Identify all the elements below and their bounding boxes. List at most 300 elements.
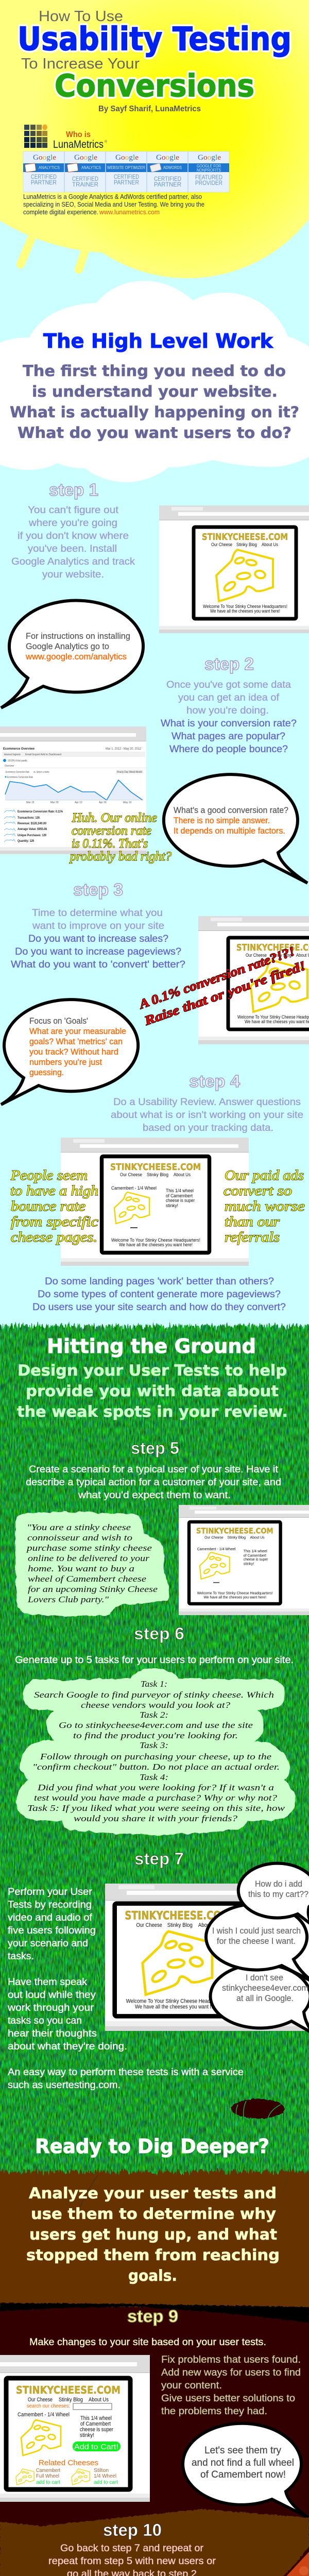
browser: analytics ecommerce overview: 100.00% of total quantity xyxy=(8,759,27,762)
browser: analytics ecommerce overview: Ecommerce Conversion Rate xyxy=(6,771,29,774)
site frame: Our Cheese xyxy=(211,542,232,547)
speech bubble: focus on goals: guessing. xyxy=(29,1067,64,1077)
sun glow xyxy=(33,0,309,278)
step 7 text: Perform your User xyxy=(8,1887,93,1897)
step 7 text: work through your xyxy=(7,2003,94,2013)
site frame: Related Cheeses xyxy=(39,2459,98,2467)
speech bubble: add to cart question: How do i add xyxy=(255,1879,302,1889)
badge 2: CERTIFIED xyxy=(72,175,98,182)
badge 1 xyxy=(25,154,60,186)
speech bubble: wish for search xyxy=(206,1904,309,1982)
scenario note: Lovers Club party." xyxy=(27,1595,109,1604)
title: Conversions xyxy=(55,68,254,104)
step 1 text: where you're going xyxy=(28,518,117,529)
site frame: cheese is super xyxy=(244,1557,268,1562)
title: By Sayf Sharif, LunaMetrics xyxy=(98,105,201,113)
who is lunametrics logo: Who is xyxy=(66,130,91,139)
step 7 text: Tests by recording xyxy=(8,1900,92,1910)
analyze text: goals. xyxy=(128,2267,177,2284)
badge 1: Google xyxy=(33,154,56,162)
soil roots xyxy=(21,2172,288,2226)
browser: analytics ecommerce overview: vs. Select a metric xyxy=(33,771,49,774)
site frame: We have all the cheeses you want here! xyxy=(135,2004,221,2010)
step 4 text: about what is or isn't working on your site xyxy=(111,1110,303,1121)
fixes list: Fix problems that users found. xyxy=(161,2354,301,2365)
step 2 text xyxy=(161,680,297,755)
step 5 text: describe a typical action for a customer of your site, and xyxy=(26,1477,281,1488)
site frame: Our Cheese xyxy=(246,953,267,958)
speech bubble: add to cart question xyxy=(238,1863,309,1926)
site frame: Camembert xyxy=(36,2468,60,2473)
badge 4: PARTNER xyxy=(154,181,181,188)
dark stratum xyxy=(0,2303,309,2323)
badge 1: CERTIFIED xyxy=(31,173,57,180)
site frame: Our Cheese xyxy=(28,2397,53,2403)
step 7 text xyxy=(7,1887,244,2091)
site frame: Camembert - 1/4 Wheel xyxy=(111,1185,157,1191)
site frame xyxy=(115,1904,241,2016)
step 3 label: step 3 xyxy=(73,880,123,899)
site frame: of Camembert xyxy=(244,1553,267,1558)
browser: analytics ecommerce overview: Hourly Day Week Month xyxy=(117,771,142,774)
step 7 text: out loud while they xyxy=(8,1990,96,2001)
who is lunametrics logo: LunaMetrics xyxy=(53,139,104,150)
speech bubble: analytics instructions: www.google.com/analytics xyxy=(25,652,127,662)
badge 4: Google xyxy=(156,154,179,162)
badge 1: PARTNER xyxy=(31,179,57,186)
speech bubble: focus on goals: numbers you're just xyxy=(29,1057,102,1067)
step 4 questions: Do some landing pages 'work' better than others? xyxy=(45,1276,274,1287)
task list note: Did you find what you were looking for? If it wasn't a xyxy=(37,1783,274,1792)
speech bubble: full wheel of camembert: Let's see them try xyxy=(204,2445,281,2456)
scenario note xyxy=(15,1512,169,1616)
handwritten note: bounce rate: cheese pages. xyxy=(11,1229,97,1245)
site frame: of Camembert xyxy=(80,2421,111,2427)
speech bubble: full wheel of camembert: of Camembert now! xyxy=(200,2469,286,2480)
intro text: is understand your website. xyxy=(32,383,278,400)
speech bubble: good conversion rate xyxy=(164,774,307,883)
task list note: Go to stinkycheese4ever.com and use the site xyxy=(59,1720,253,1730)
scenario note: for an upcoming Stinky Cheese xyxy=(28,1584,158,1594)
site frame: About Us xyxy=(89,2397,109,2403)
badge 4 xyxy=(150,154,182,188)
step 7 text: hear their thoughts xyxy=(8,2028,97,2039)
line chart: Apr 12 xyxy=(75,801,82,804)
step 9 text: Make changes to your site based on your user tests. xyxy=(29,2337,266,2348)
speech bubble: not in google: at all in Google. xyxy=(236,1993,294,2003)
section heading: the high level work xyxy=(10,330,299,442)
handwritten note: bounce rate: People seem xyxy=(10,1167,88,1183)
browser: analytics ecommerce overview: Email Export Add to Dashboard xyxy=(25,753,61,756)
badge 3: CERTIFIED xyxy=(114,173,139,180)
site frame: Stinky Blog xyxy=(59,2397,83,2403)
scenario note: connoisseur and wish to xyxy=(27,1533,132,1543)
google partner badges xyxy=(23,151,229,192)
site frame: About Us xyxy=(250,1535,265,1540)
handwritten note: paid ads xyxy=(224,1167,305,1245)
scenario note: purchase some stinky cheese xyxy=(26,1543,152,1553)
handwritten note: paid ads: much worse xyxy=(225,1198,305,1214)
deep underground xyxy=(0,2307,309,2576)
metrics list xyxy=(4,810,63,843)
site frame: Welcome To Your Stinky Cheese Headquarters! xyxy=(111,1238,200,1243)
step 5 label: step 5 xyxy=(131,1438,179,1458)
title: Usability Testing xyxy=(18,20,291,58)
browser: analytics ecommerce overview xyxy=(0,726,146,854)
step 5 text: Create a scenario for a typical user of your site. Have it xyxy=(29,1464,279,1475)
browser: user test recording xyxy=(105,1884,309,2031)
metrics list: Unique Purchases: 129 xyxy=(18,834,47,837)
badge 5: GOOGLE FOR xyxy=(197,164,221,168)
site frame: Welcome To Your Stinky Cheese Headquarters! xyxy=(203,604,287,609)
site frame: This 1/4 wheel xyxy=(166,1188,194,1193)
speech bubble: full wheel of camembert: and not find a full wheel xyxy=(192,2458,294,2468)
handwritten note: bounce rate: from specific xyxy=(11,1214,98,1229)
site frame: STINKYCHEESE.COM xyxy=(196,1526,273,1535)
red rotated note: boss demand: A 0.1% conversion rate?!?! xyxy=(136,944,297,1012)
section heading: the high level work: The High Level Work xyxy=(43,330,273,352)
site frame: Stinky Blog xyxy=(271,953,291,958)
browser: analytics ecommerce overview: Ecommerce Conversion Rate xyxy=(7,776,33,779)
step 7 text: tasks so you can xyxy=(8,2015,82,2026)
task list note: Task 4: xyxy=(140,1772,168,1782)
analyze text: users get hung up, and what xyxy=(29,2226,277,2243)
site frame: About Us xyxy=(198,1922,219,1928)
browser: analytics ecommerce overview: Advanced Segments xyxy=(4,753,21,756)
red rotated note: boss demand: Raise that or you're fired! xyxy=(142,959,307,1028)
hole in the ground xyxy=(231,2099,285,2122)
site frame: Full Wheel xyxy=(36,2473,59,2479)
speech bubble: not in google xyxy=(211,1964,309,2033)
badge 5: Google xyxy=(198,154,221,162)
badge 4: CERTIFIED xyxy=(154,175,181,182)
step 10 text: Go back to step 7 and repeat or xyxy=(60,2543,204,2554)
lunametrics description: www.lunametrics.com xyxy=(99,208,160,216)
metrics list: Quantity: 129 xyxy=(18,840,35,843)
site frame: Stilton xyxy=(94,2468,109,2473)
task list note xyxy=(16,1668,296,1835)
site frame: Welcome To Your Stinky Cheese Headquarters! xyxy=(197,1591,273,1596)
badge 5 xyxy=(195,154,222,187)
site frame: About Us xyxy=(174,1172,191,1177)
step 2 text: Where do people bounce? xyxy=(169,744,288,755)
sun xyxy=(0,0,309,253)
badge 2: TRAINER xyxy=(72,181,98,188)
speech bubble: wish for search: for the cheese I want. xyxy=(217,1936,296,1946)
who is lunametrics logo: ® xyxy=(105,140,108,144)
handwritten note: paid ads: Our paid ads xyxy=(225,1167,304,1183)
site frame: stinky! xyxy=(80,2432,94,2438)
handwritten note: paid ads: than our xyxy=(225,1214,280,1229)
step 2 text: how you're doing. xyxy=(186,705,269,716)
site frame: cheese is super xyxy=(166,1198,195,1203)
step 3 text xyxy=(11,908,185,970)
site frame xyxy=(194,527,296,619)
site frame: Camembert - 1/4 Wheel xyxy=(197,1547,236,1551)
intro text xyxy=(10,362,299,442)
site frame: We have all the cheeses you want here! xyxy=(203,1595,266,1599)
task list note: cheese vendors would you look at? xyxy=(81,1700,231,1710)
speech bubble: full wheel of camembert xyxy=(183,2424,308,2517)
badge 4: ADWORDS xyxy=(163,165,182,170)
metrics list: Average Value: $955.08 xyxy=(18,828,47,831)
line chart: Mar 29 xyxy=(50,801,59,804)
step 4 questions: Do some types of content generate more pageviews? xyxy=(38,1289,281,1300)
site frame: stinky! xyxy=(166,1203,178,1208)
scenario note: online to be delivered to your xyxy=(28,1553,149,1563)
handwritten note: conversion rate xyxy=(69,811,171,863)
site frame xyxy=(228,938,309,1029)
browser: improved site xyxy=(0,2355,150,2502)
handwritten note: conversion rate: conversion rate xyxy=(72,824,151,838)
step 7 text: such as usertesting.com. xyxy=(8,2080,121,2091)
site frame: Our Cheese xyxy=(204,1535,224,1540)
analyze text: stopped them from reaching xyxy=(26,2246,280,2264)
step 1 label: step 1 xyxy=(49,480,98,499)
site frame: We have all the cheeses you want here! xyxy=(119,1242,193,1247)
speech bubble: analytics instructions: For instructions on installing xyxy=(26,631,130,641)
scenario note: wheel of Camembert cheese xyxy=(28,1574,147,1584)
browser: analytics ecommerce overview: Ecommerce Overview xyxy=(3,748,35,751)
step 2 text: What pages are popular? xyxy=(171,731,285,742)
grass field xyxy=(0,1326,309,2172)
speech bubble: analytics instructions xyxy=(1,601,143,708)
step 1 text: if you don't know where xyxy=(18,531,129,541)
line chart xyxy=(5,780,143,804)
site frame: cheese is super xyxy=(80,2427,113,2433)
step 3 text: Time to determine what you xyxy=(32,908,163,919)
metrics list: Transactions: 126 xyxy=(18,817,40,820)
site frame: add to cart xyxy=(94,2480,118,2485)
handwritten note: paid ads: convert so xyxy=(224,1183,292,1198)
fixes list: the problems they had. xyxy=(161,2406,267,2417)
task list note: Task 2: xyxy=(140,1710,168,1720)
step 4 text xyxy=(111,1097,303,1133)
title xyxy=(18,8,291,113)
heading: hitting the ground: the weak spots in your review. xyxy=(17,1403,288,1420)
step 10 label: step 10 xyxy=(103,2520,162,2539)
scenario note: home. You want to buy a xyxy=(28,1564,134,1573)
panel: orange bedrock xyxy=(0,2552,309,2576)
step 7 text: tasks. xyxy=(8,1951,34,1962)
step 2 text: Once you've got some data xyxy=(166,680,291,690)
heading: hitting the ground: Hitting the Ground xyxy=(47,1335,256,1358)
step 7 text: five users following xyxy=(8,1925,96,1936)
browser: camembert page, step 5 xyxy=(179,1505,309,1615)
step 7 text: video and audio of xyxy=(8,1912,93,1923)
step 3 text: Do you want to increase pageviews? xyxy=(15,946,181,957)
site frame: add to cart xyxy=(36,2480,60,2485)
title: To Increase Your xyxy=(21,56,140,72)
step 7 label: step 7 xyxy=(134,1849,184,1868)
site frame: STINKYCHEESE.COM xyxy=(16,2384,121,2396)
title: How To Use xyxy=(39,8,123,25)
site frame: Stinky Blog xyxy=(147,1172,168,1177)
site frame xyxy=(189,1522,281,1604)
line chart: May 10 xyxy=(123,801,132,804)
site frame: Stinky Blog xyxy=(227,1535,246,1540)
site frame: We have all the cheeses you want here! xyxy=(210,608,280,614)
badge 1: ANALYTICS xyxy=(39,165,60,170)
speech bubble: not in google: I don't see xyxy=(246,1973,283,1982)
intro text: What is actually happening on it? xyxy=(10,403,299,421)
heading: hitting the ground xyxy=(17,1335,288,1420)
intro text: The first thing you need to do xyxy=(23,362,286,380)
badge 5: NONPROFITS xyxy=(197,168,221,173)
task list note: to find the product you're looking for. xyxy=(73,1731,238,1740)
site frame: Camembert - 1/4 Wheel xyxy=(18,2412,70,2418)
step 4 questions xyxy=(32,1276,286,1313)
heading: hitting the ground: Design your User Tests to help xyxy=(18,1362,287,1379)
title: Usability Testing xyxy=(18,20,291,58)
speech bubble: good conversion rate: What's a good conversion rate? xyxy=(174,805,288,815)
speech bubble: focus on goals: What are your measurable xyxy=(29,1026,126,1036)
metrics list: Revenue: $120,340.00 xyxy=(18,822,47,825)
browser: stinkycheese home page xyxy=(159,505,309,633)
site frame: search our cheeses: xyxy=(27,2403,70,2409)
step 3 text: What do you want to 'convert' better? xyxy=(11,959,185,970)
site frame: STINKYCHEESE.COM xyxy=(110,1162,201,1173)
metrics list: Ecommerce Conversion Rate: 0.11% xyxy=(18,810,63,814)
site frame: Our Cheese xyxy=(136,1922,162,1928)
analyze text xyxy=(26,2184,280,2284)
badge 3: PARTNER xyxy=(114,179,139,186)
line chart: Mar 15 xyxy=(26,801,35,804)
step 3 text: Do you want to increase sales? xyxy=(28,934,168,944)
handwritten note: conversion rate: Huh. Our online xyxy=(72,811,157,825)
step 1 text: You can't figure out xyxy=(28,505,119,516)
sky background xyxy=(0,0,309,1391)
task list note: Task 1: xyxy=(141,1679,167,1689)
step 7 text: your scenario and xyxy=(8,1938,88,1949)
lunametrics description xyxy=(23,193,204,216)
task list note: "confirm checkout" button. Do not place an actual order. xyxy=(32,1762,280,1772)
step 5 text: what you'd expect them to want. xyxy=(78,1490,231,1501)
site frame xyxy=(102,1156,209,1253)
handwritten note: bounce rate xyxy=(10,1167,98,1245)
task list note: Follow through on purchasing your cheese, up to the xyxy=(40,1752,272,1761)
task list note: Task 3: xyxy=(140,1740,168,1750)
handwritten note: bounce rate: to have a high xyxy=(10,1183,98,1198)
title: Conversions xyxy=(55,68,254,104)
site frame xyxy=(6,2378,130,2489)
step 4 text: based on your tracking data. xyxy=(143,1123,273,1133)
step 2 text: What is your conversion rate? xyxy=(161,718,297,729)
browser: analytics ecommerce overview: Overview xyxy=(5,765,14,768)
who is lunametrics logo xyxy=(24,125,108,150)
lunametrics description: LunaMetrics is a Google Analytics & AdWords certified partner, also xyxy=(23,193,202,200)
step 7 text: An easy way to perform these tests is with a service xyxy=(8,2067,244,2078)
line chart: Apr 26 xyxy=(99,801,107,804)
site frame: This 1/4 wheel xyxy=(244,1549,267,1553)
badge 2: ANALYTICS xyxy=(81,165,101,170)
fixes list: Give users better solutions to xyxy=(161,2393,295,2404)
badge 2 xyxy=(67,154,101,188)
browser: stinkycheese home page, step 3 xyxy=(198,916,309,1044)
task list note: Search Google to find purveyor of stinky cheese. Which xyxy=(34,1690,274,1700)
heading: hitting the ground: provide you with data about xyxy=(26,1382,279,1400)
task list note: test would you have made a purchase? Why or why not? xyxy=(34,1793,278,1803)
speech bubble: wish for search: I wish I could just search xyxy=(212,1926,301,1936)
badge 5: FEATURED xyxy=(195,174,222,181)
badge 5: PROVIDER xyxy=(195,179,222,187)
handwritten note: paid ads: referrals xyxy=(225,1229,280,1245)
step 4 questions: Do users use your site search and how do they convert? xyxy=(32,1302,286,1313)
site frame: 1/4 Wheel xyxy=(94,2473,116,2479)
cloud xyxy=(0,281,309,482)
site frame: Welcome To Your Stinky Cheese Headquarters! xyxy=(126,1998,230,2005)
browser: analytics ecommerce overview: Mar 1, 2012 - May 20, 2012 xyxy=(106,748,142,751)
panel: step 10 soil layer xyxy=(0,2509,309,2576)
site frame: Our Cheese xyxy=(120,1172,142,1177)
speech bubble: good conversion rate: It depends on multiple factors. xyxy=(174,826,285,836)
add to cart button: Add to Cart! xyxy=(74,2443,118,2451)
step 3 text: want to improve on your site xyxy=(32,921,164,931)
step 7 text: Have them speak xyxy=(8,1977,88,1988)
handwritten note: conversion rate: probably bad right? xyxy=(69,850,171,863)
badge 3 xyxy=(107,154,145,186)
speech bubble: focus on goals: Focus on 'Goals' xyxy=(29,1016,88,1026)
step 1 text xyxy=(11,505,135,580)
heading: ready to dig deeper: Ready to Dig Deeper? xyxy=(35,2135,269,2158)
lunametrics description: specializing in SEO, Social Media and User Testing. We bring you the xyxy=(23,200,204,208)
task list note: Task 5: If you liked what you were seeing on this site, how xyxy=(27,1803,285,1813)
step 2 label: step 2 xyxy=(204,654,254,673)
speech bubble: focus on goals xyxy=(1,999,138,1105)
badge 3: WEBSITE OPTIMIZER xyxy=(107,165,145,170)
badge 2: Google xyxy=(74,154,97,162)
scenario note: "You are a stinky cheese xyxy=(27,1522,131,1532)
red rotated note: boss demand xyxy=(136,944,307,1028)
lunametrics description: complete digital experience. xyxy=(23,208,98,216)
handwritten note: conversion rate: is 0.11%. That's xyxy=(72,837,148,851)
step 6 text: Generate up to 5 tasks for your users to perform on your site. xyxy=(15,1655,294,1666)
analyze text: Analyze your user tests and xyxy=(29,2184,277,2202)
handwritten note: bounce rate: bounce rate xyxy=(11,1198,85,1214)
speech bubble: focus on goals: you track? Without hard xyxy=(29,1047,118,1057)
step 4 label: step 4 xyxy=(189,1072,241,1091)
speech bubble: focus on goals: goals? What 'metrics' can xyxy=(29,1037,123,1046)
speech bubble: good conversion rate: There is no simple answer. xyxy=(174,816,270,825)
site frame: stinky! xyxy=(244,1562,254,1566)
site frame: This 1/4 wheel xyxy=(80,2415,112,2421)
step 5 text xyxy=(26,1464,281,1501)
step 7 text: about what they're doing. xyxy=(8,2041,127,2052)
sun rays xyxy=(21,162,309,269)
site frame: Stinky Blog xyxy=(167,1922,193,1928)
step 10 text xyxy=(15,2543,249,2576)
site frame: STINKYCHEESE.COM xyxy=(202,532,288,543)
fixes list xyxy=(161,2354,301,2417)
site frame: Stinky Blog xyxy=(236,542,257,547)
task list note: would you share it with your friends? xyxy=(74,1814,238,1823)
browser: camembert page, step 4 xyxy=(61,1138,249,1266)
intro text: What do you want users to do? xyxy=(18,424,291,442)
speech bubble: analytics instructions: Google Analytics go to xyxy=(26,641,109,651)
fixes list: Add new ways for users to find xyxy=(161,2367,301,2378)
site frame: of Camembert xyxy=(166,1193,193,1198)
step 1 text: Google Analytics and track xyxy=(11,556,135,567)
badge 3: Google xyxy=(115,154,139,162)
step 10 text: repeat from step 5 with new users or xyxy=(48,2556,216,2567)
step 1 text: you've been. Install xyxy=(28,544,117,554)
fixes list: your content. xyxy=(161,2380,222,2391)
site frame: STINKYCHEESE.COM xyxy=(125,1909,231,1922)
site frame: About Us xyxy=(262,542,278,547)
step 4 text: Do a Usability Review. Answer questions xyxy=(113,1097,301,1108)
soil layer xyxy=(0,2159,309,2308)
step 9 label: step 9 xyxy=(127,2307,178,2326)
